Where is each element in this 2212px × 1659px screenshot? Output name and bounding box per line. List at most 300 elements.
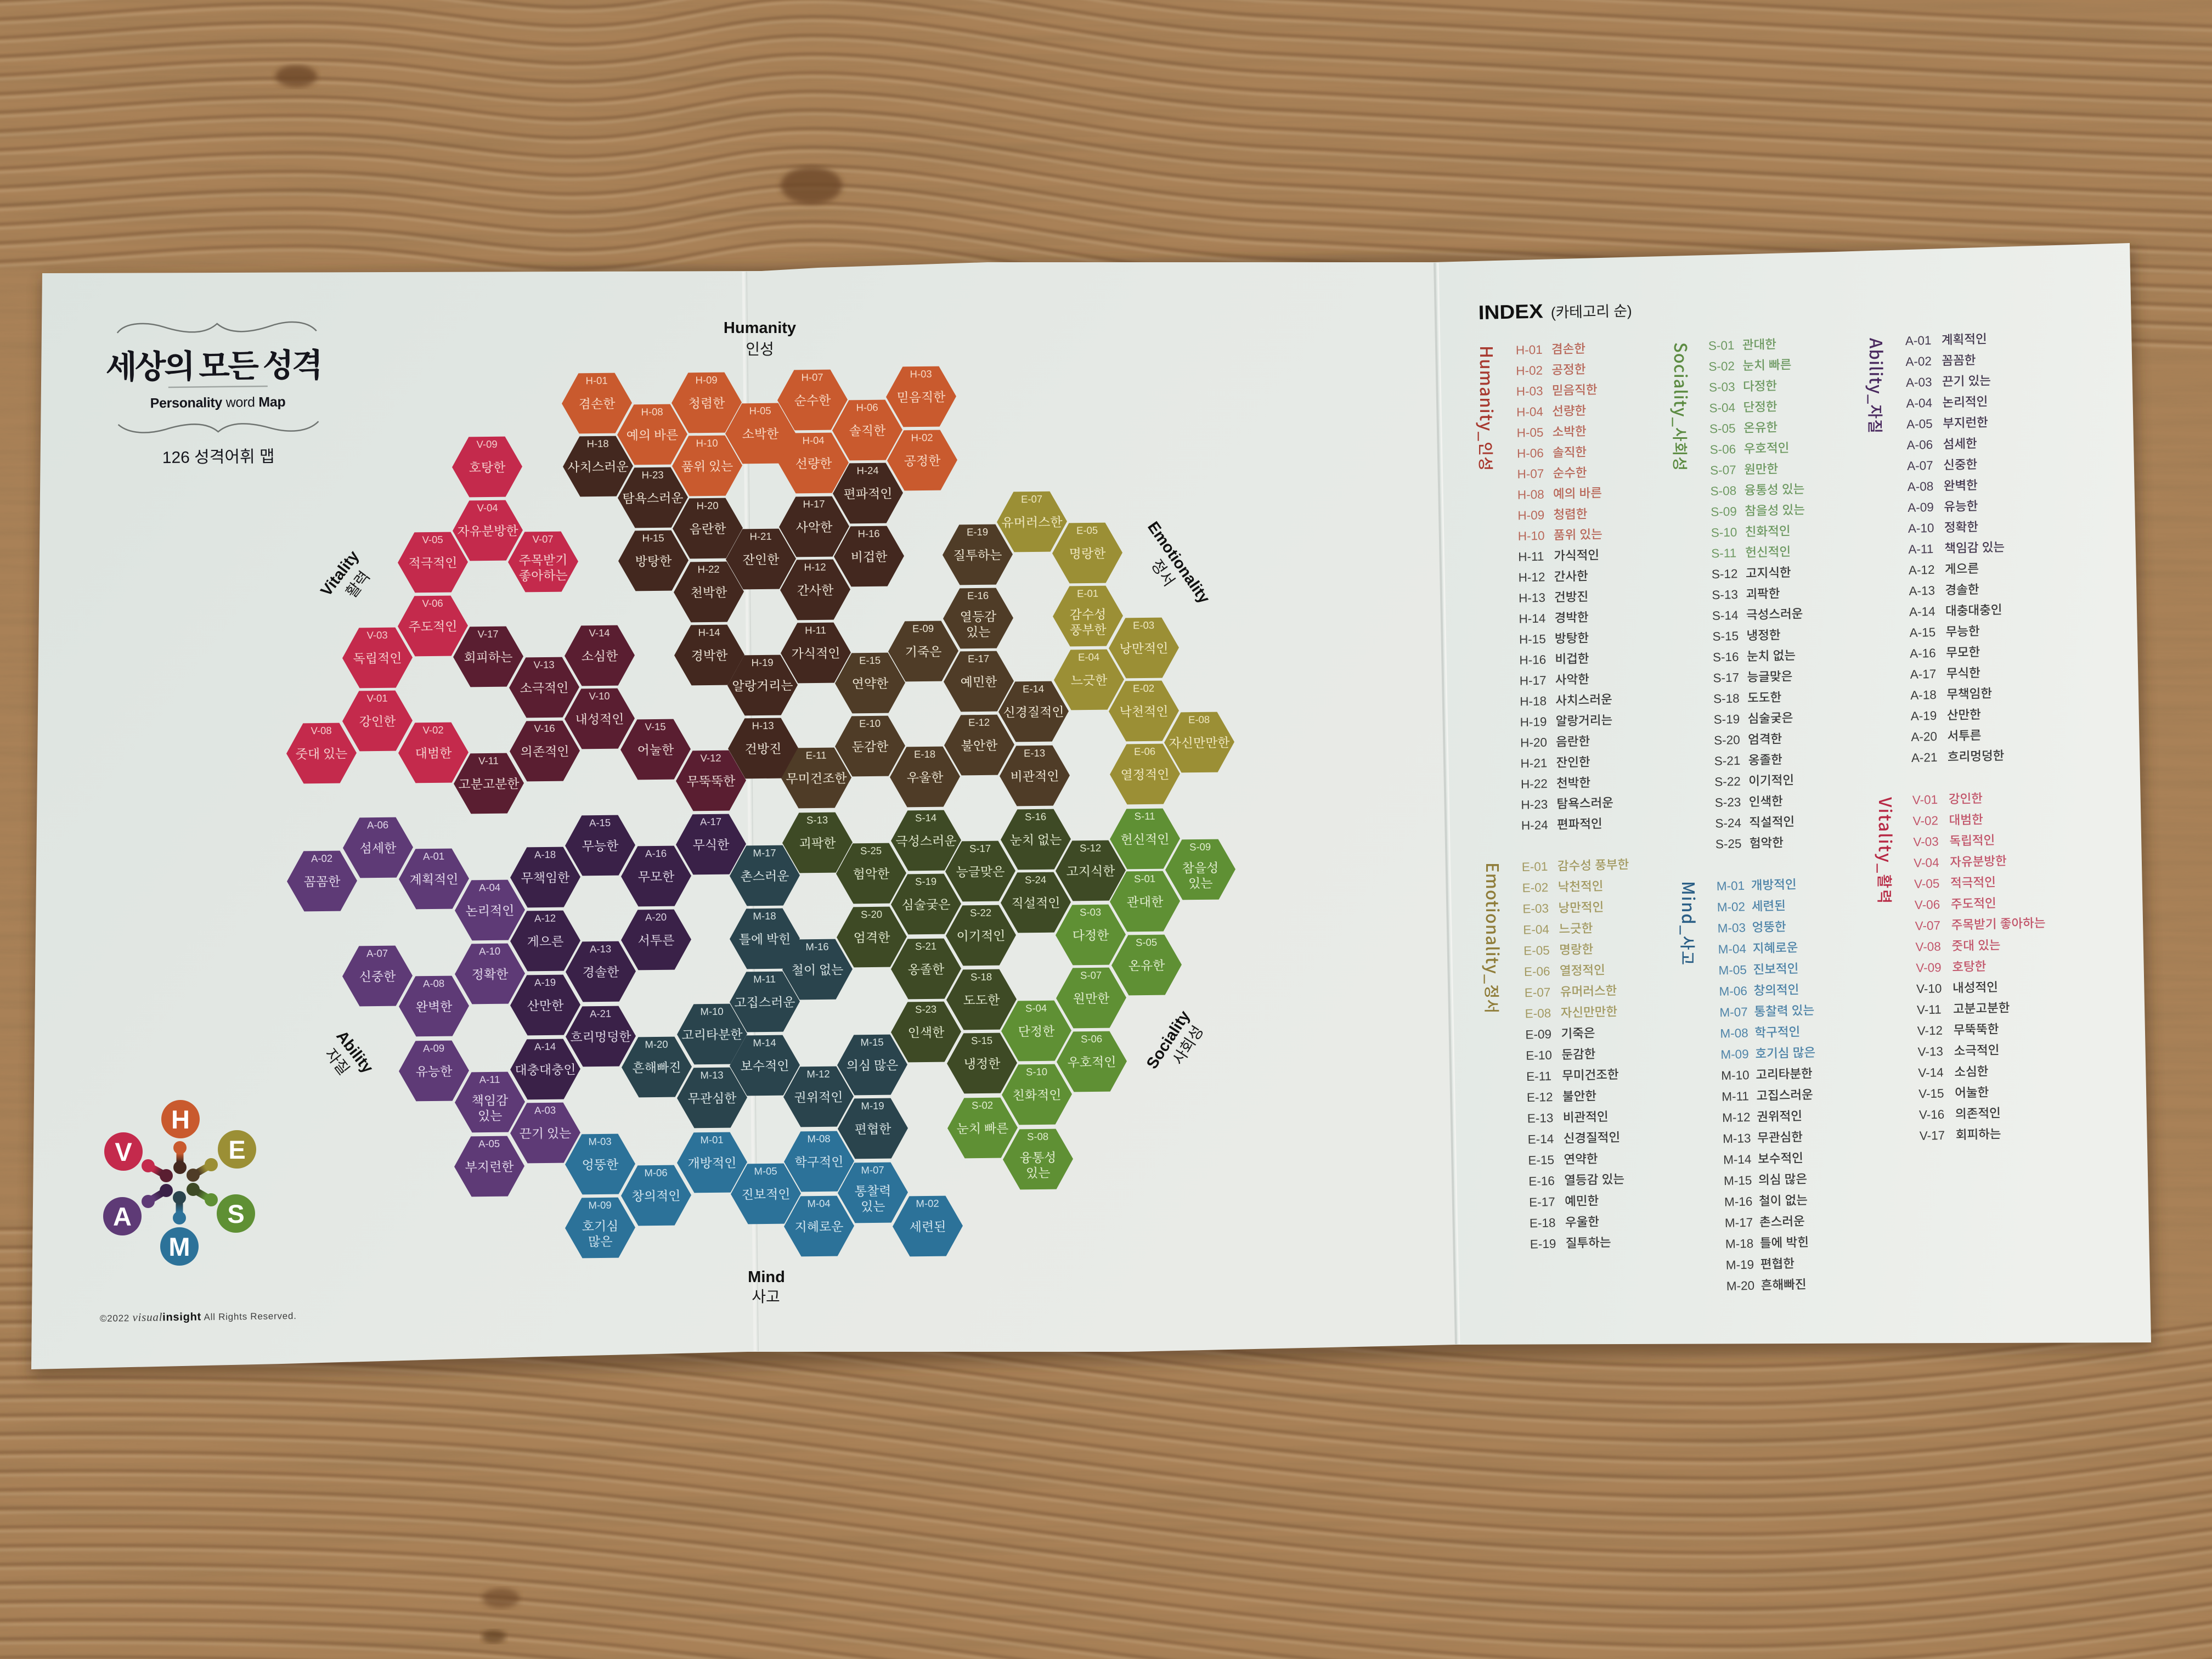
category label: Sociality: 사회성	[1169, 1023, 1206, 1068]
index list: Humanity: H-06	[1517, 446, 1544, 460]
index list: Emotionality: 우울한	[1565, 1215, 1599, 1229]
index list: Ability: 게으른	[1945, 562, 1979, 576]
index list: Sociality: 다정한	[1743, 379, 1777, 393]
index list: Emotionality: 둔감한	[1561, 1047, 1596, 1062]
index list: Sociality: S-12	[1712, 567, 1738, 581]
node: V	[104, 1132, 143, 1171]
index list: Humanity: 가식적인	[1554, 548, 1599, 563]
category label: Ability: Ability	[332, 1028, 376, 1076]
index list: Emotionality: E-10	[1526, 1048, 1552, 1063]
category label: Humanity: 인성	[746, 341, 774, 358]
Ability hexagons: 논리적인	[465, 904, 515, 918]
Vitality hexagons: 고분고분한	[458, 777, 520, 792]
index list: Vitality: V-09	[1916, 961, 1942, 975]
Mind hexagons: M-17	[753, 847, 776, 859]
index list: Ability: 서투른	[1947, 729, 1982, 743]
Sociality hexagons: 다정한	[1073, 929, 1109, 943]
Sociality hexagons: S-19	[915, 876, 936, 887]
Humanity hexagons: H-19	[751, 657, 774, 668]
Ability hexagons: A-08	[423, 978, 444, 989]
index list: Humanity: 알랑거리는	[1556, 713, 1612, 729]
Sociality hexagons: S-22	[970, 907, 991, 918]
Sociality hexagons: 심술궂은	[901, 898, 951, 912]
Sociality hexagons: 융통성	[1020, 1151, 1056, 1165]
Mind hexagons: 창의적인	[631, 1189, 681, 1203]
index list: Sociality: S-05	[1709, 421, 1736, 436]
index list: Vitality: 대범한	[1949, 812, 1983, 827]
Mind hexagons: M-05	[754, 1165, 777, 1177]
index list: Mind: M-17	[1725, 1216, 1753, 1230]
Humanity hexagons: H-17	[803, 498, 825, 510]
Humanity hexagons: 비겁한	[851, 550, 888, 564]
Sociality hexagons: 이기적인	[956, 929, 1006, 943]
index list: Mind: M-18	[1725, 1237, 1753, 1251]
Mind hexagons: 세련된	[910, 1220, 946, 1234]
Emotionality hexagons: 낙천적인	[1119, 705, 1169, 719]
index list: Humanity: H-09	[1517, 508, 1544, 522]
category label: Emotionality: 정서	[1148, 556, 1178, 589]
Sociality hexagons: S-17	[969, 843, 991, 854]
spoke: A	[142, 1184, 173, 1208]
index list: Sociality: S-15	[1712, 629, 1739, 644]
spoke: H	[173, 1141, 187, 1174]
index heading: INDEX	[1478, 300, 1543, 324]
title block	[105, 321, 324, 467]
Mind hexagons: 무관심한	[687, 1092, 737, 1105]
Emotionality hexagons: 비관적인	[1010, 770, 1059, 783]
index list: Humanity: 방탕한	[1555, 631, 1589, 646]
index list: Mind: M-19	[1726, 1257, 1754, 1272]
index list: Ability: A-20	[1911, 730, 1937, 744]
index list: Sociality: S-16	[1713, 650, 1739, 664]
Ability hexagons: A-18	[534, 849, 556, 860]
Vitality hexagons: 강인한	[359, 715, 396, 729]
Humanity hexagons: 소박한	[742, 427, 779, 441]
Sociality hexagons: 극성스러운	[895, 834, 957, 849]
Vitality hexagons: 독립적인	[353, 652, 402, 665]
Sociality hexagons: S-01	[1134, 873, 1155, 884]
index list: Vitality: 독립적인	[1949, 833, 1995, 848]
index list: Humanity: H-19	[1520, 715, 1547, 729]
index list: Mind: M-11	[1722, 1090, 1749, 1104]
index list: Humanity: H-04	[1516, 405, 1543, 419]
Mind hexagons: 진보적인	[741, 1188, 791, 1201]
Ability hexagons: 꼼꼼한	[304, 875, 341, 889]
index list: Emotionality: 무미건조한	[1562, 1068, 1619, 1082]
Sociality hexagons: S-15	[971, 1035, 992, 1046]
Vitality hexagons: 소극적인	[520, 681, 569, 695]
title ornament bottom	[119, 421, 319, 433]
Humanity hexagons: 알랑거리는	[732, 679, 793, 693]
Ability hexagons: 계획적인	[409, 873, 459, 887]
Ability hexagons: A-13	[590, 943, 611, 955]
index list: Sociality: S-04	[1709, 400, 1735, 415]
index list: Emotionality: E-13	[1527, 1111, 1554, 1125]
index list: Vitality: 회피하는	[1956, 1127, 2001, 1142]
Mind hexagons: 틀에 박힌	[739, 933, 791, 946]
index list: Ability: A-02	[1905, 354, 1932, 369]
Sociality hexagons	[782, 808, 1236, 1190]
Sociality hexagons: S-05	[1136, 936, 1157, 948]
index list: Humanity: H-22	[1521, 777, 1548, 791]
index list: Ability: A-03	[1906, 375, 1932, 390]
Ability hexagons: A-12	[534, 912, 556, 924]
Vitality hexagons: 적극적인	[408, 556, 458, 570]
Sociality hexagons: 있는	[1026, 1166, 1051, 1180]
Mind hexagons: M-13	[700, 1069, 724, 1081]
index list: Humanity: 공정한	[1551, 363, 1586, 377]
index list: Vitality: 호탕한	[1952, 960, 1987, 974]
index list: Vitality: 주목받기 좋아하는	[1951, 916, 2046, 932]
index list: Ability: 무모한	[1946, 645, 1980, 659]
index list: Emotionality: 열정적인	[1560, 963, 1605, 978]
Humanity hexagons: 사악한	[796, 521, 833, 534]
Sociality hexagons: 험악한	[853, 867, 890, 881]
Humanity hexagons: 건방진	[745, 742, 781, 756]
index list: Humanity: H-07	[1517, 467, 1544, 481]
index list: Mind: 진보적인	[1753, 962, 1799, 977]
Emotionality hexagons: 우울한	[907, 771, 944, 785]
index list: Humanity: H-18	[1520, 694, 1547, 708]
index list: Sociality: 관대한	[1742, 337, 1776, 352]
index list: Emotionality: 낙천적인	[1558, 879, 1604, 894]
index list: Sociality: 험악한	[1750, 836, 1784, 850]
Ability hexagons: 경솔한	[583, 966, 619, 979]
index list: Sociality: S-21	[1714, 754, 1740, 768]
index list: Vitality: V-14	[1918, 1065, 1944, 1080]
Emotionality hexagons: E-07	[1021, 493, 1042, 505]
Vitality hexagons: V-06	[422, 597, 443, 609]
index list: Mind: 개방적인	[1751, 878, 1797, 892]
index list: Mind: 보수적인	[1758, 1151, 1803, 1166]
Sociality hexagons: S-14	[915, 812, 936, 823]
index list: Humanity: 순수한	[1553, 466, 1587, 480]
index list: Humanity: H-20	[1520, 736, 1547, 750]
index list: Sociality: 엄격한	[1748, 732, 1782, 747]
Humanity hexagons: 음란한	[690, 522, 726, 536]
index list: Ability: A-10	[1908, 521, 1934, 535]
Vitality hexagons: V-11	[478, 755, 499, 766]
index list: Sociality: 융통성 있는	[1745, 482, 1805, 498]
index list: Emotionality: 명랑한	[1559, 943, 1594, 957]
index list: Ability: A-17	[1910, 667, 1936, 681]
index list: Ability: A-05	[1906, 417, 1933, 431]
Emotionality hexagons: E-02	[1133, 682, 1154, 694]
Mind hexagons: M-11	[753, 973, 776, 985]
category label: Humanity: Humanity	[724, 319, 796, 337]
index list: Vitality: 고분고분한	[1953, 1001, 2010, 1016]
Humanity hexagons: H-03	[910, 368, 932, 380]
Vitality hexagons: 자유분방한	[457, 524, 518, 539]
Emotionality hexagons: E-19	[967, 526, 988, 538]
index list: Emotionality: 불안한	[1562, 1089, 1596, 1104]
index list: Emotionality: E-16	[1528, 1174, 1555, 1188]
index list: Vitality: 자유분방한	[1950, 854, 2007, 869]
index list: Mind: M-09	[1720, 1047, 1749, 1062]
index list: Vitality: 줏대 있는	[1951, 938, 2001, 953]
Vitality hexagons: 주도적인	[408, 620, 458, 634]
Humanity hexagons: H-22	[697, 563, 720, 575]
index list: Sociality: S-02	[1708, 359, 1735, 374]
panel: folded paper sheet	[31, 243, 2151, 1369]
index list: Humanity: 건방진	[1554, 590, 1588, 604]
index list: Mind: M-20	[1726, 1279, 1754, 1293]
Ability hexagons: 무능한	[582, 839, 619, 853]
index list: Ability: 책임감 있는	[1944, 540, 2005, 555]
index list: Sociality: 단정한	[1743, 400, 1778, 414]
Vitality hexagons: V-04	[477, 502, 498, 514]
Sociality hexagons: 냉정한	[964, 1057, 1001, 1071]
Mind hexagons: M-12	[806, 1068, 830, 1080]
index list: Humanity: H-13	[1519, 591, 1545, 605]
Mind hexagons: M-19	[861, 1100, 884, 1111]
Ability hexagons: A-04	[479, 882, 500, 893]
index list: Humanity: H-11	[1518, 550, 1544, 564]
Emotionality hexagons: E-01	[1077, 588, 1098, 599]
Vitality hexagons: 대범한	[415, 747, 452, 760]
index list: Humanity: 겸손한	[1551, 342, 1585, 356]
index list: Sociality: 직설적인	[1749, 815, 1795, 830]
index list: Sociality: S-23	[1715, 795, 1741, 810]
logo: HESMAV flower	[103, 1100, 256, 1266]
Sociality hexagons: S-18	[970, 971, 992, 983]
index list: Sociality: 고지식한	[1746, 566, 1791, 580]
Mind hexagons: 지혜로운	[794, 1220, 844, 1234]
title ornament top	[117, 322, 317, 333]
index list: Emotionality: E-12	[1527, 1090, 1553, 1104]
index list: Humanity: H-12	[1519, 570, 1545, 584]
index list: Sociality: S-07	[1710, 463, 1736, 477]
index list: Sociality: 극성스러운	[1746, 607, 1803, 622]
Vitality hexagons: 회피하는	[464, 651, 513, 664]
index heading: (카테고리 순)	[1550, 303, 1632, 321]
Vitality hexagons: V-01	[366, 692, 388, 704]
Sociality hexagons: S-11	[1135, 810, 1155, 822]
Humanity hexagons: 천박한	[691, 586, 727, 600]
index list: Ability: A-09	[1908, 500, 1934, 515]
Emotionality hexagons: 있는	[966, 625, 991, 639]
Humanity hexagons: H-02	[911, 432, 933, 443]
index list: Mind: 고리타분한	[1756, 1066, 1813, 1082]
category label: Vitality: 활력	[343, 568, 373, 601]
Emotionality hexagons: 무미건조한	[786, 771, 847, 786]
index list: Ability: 논리적인	[1942, 394, 1988, 409]
index list: Ability: 끈기 있는	[1942, 374, 1991, 388]
Vitality hexagons: V-07	[532, 533, 554, 545]
index list: Vitality: V-17	[1920, 1128, 1945, 1143]
Sociality hexagons: 도도한	[963, 994, 1000, 1007]
index list: Mind: M-15	[1724, 1173, 1752, 1188]
Mind hexagons: 의심 많은	[847, 1059, 898, 1073]
index list: Ability: 유능한	[1944, 499, 1978, 514]
index list: Humanity: 솔직한	[1553, 445, 1587, 460]
Ability hexagons: A-14	[534, 1041, 556, 1052]
Emotionality hexagons: 불안한	[961, 739, 998, 753]
index list: Ability: A-19	[1911, 709, 1937, 723]
Sociality hexagons: S-24	[1025, 874, 1046, 885]
index list: Mind: M-07	[1719, 1005, 1748, 1019]
Vitality hexagons: V-17	[477, 628, 499, 640]
index list: Ability: 부지런한	[1943, 415, 1988, 430]
index list: Emotionality: E-09	[1525, 1027, 1551, 1042]
index list: Sociality: 온유한	[1743, 420, 1778, 435]
index list: Humanity: 편파적인	[1557, 817, 1602, 832]
Vitality hexagons: V-16	[534, 723, 555, 734]
index list: Mind: M-03	[1717, 921, 1746, 935]
Humanity hexagons: 예의 바른	[627, 428, 678, 442]
index list: Mind: M-04	[1718, 942, 1746, 956]
index list: Vitality: 무뚝뚝한	[1953, 1022, 1999, 1037]
index list: Emotionality: E-19	[1530, 1237, 1556, 1251]
Humanity hexagons: 가식적인	[791, 647, 840, 661]
category label: Emotionality: Emotionality	[1144, 518, 1213, 607]
index list: Mind: 학구적인	[1754, 1025, 1801, 1040]
node: E	[218, 1130, 256, 1169]
index list: Vitality: V-10	[1916, 981, 1942, 996]
Mind hexagons: M-14	[753, 1037, 776, 1048]
Emotionality hexagons: 느긋한	[1071, 674, 1108, 687]
index list: Mind: M-08	[1720, 1026, 1748, 1041]
Vitality hexagons: V-15	[645, 721, 666, 732]
Mind hexagons: 엉뚱한	[582, 1158, 619, 1172]
index list: Vitality: V-13	[1917, 1045, 1943, 1059]
index list: Sociality	[1708, 337, 1810, 851]
Ability hexagons: 산만한	[527, 999, 564, 1013]
index list: Sociality: 심술궂은	[1747, 711, 1793, 726]
Vitality hexagons: V-02	[422, 724, 444, 736]
Mind hexagons: 학구적인	[794, 1155, 844, 1169]
Emotionality hexagons: 질투하는	[953, 549, 1002, 562]
index list: Emotionality: 느긋한	[1559, 922, 1593, 936]
Sociality hexagons: S-16	[1025, 811, 1046, 822]
Emotionality hexagons: E-03	[1133, 619, 1154, 631]
node: A	[103, 1197, 142, 1235]
subtitle english: Personality word Map	[150, 394, 286, 411]
index list: Mind: 편협한	[1760, 1257, 1795, 1271]
index list: Mind: 고집스러운	[1756, 1088, 1813, 1103]
Humanity hexagons: H-18	[586, 438, 609, 449]
Sociality hexagons: 옹졸한	[908, 963, 945, 977]
index list: Vitality: 어눌한	[1955, 1085, 1989, 1100]
Humanity hexagons: 간사한	[797, 584, 834, 597]
Sociality hexagons: S-13	[806, 814, 828, 826]
index list: Humanity: H-08	[1517, 488, 1544, 502]
Humanity hexagons: 공정한	[904, 454, 941, 468]
Ability hexagons: A-21	[590, 1008, 611, 1019]
Vitality hexagons: 의존적인	[520, 745, 569, 759]
Humanity hexagons: H-16	[857, 528, 880, 539]
index list: Emotionality: E-03	[1522, 901, 1549, 916]
hexagon map	[286, 366, 1236, 1259]
Ability hexagons: A-19	[534, 977, 556, 988]
index list: Vitality: 의존적인	[1955, 1106, 2001, 1121]
index list: Ability: 대충대충인	[1945, 603, 2002, 618]
Sociality hexagons: 관대한	[1127, 895, 1164, 909]
index list: Ability: 완벽한	[1944, 478, 1978, 493]
Humanity hexagons: H-14	[698, 627, 720, 638]
index vertical heading: Sociality: Sociality_ 사회성	[1669, 342, 1694, 471]
Vitality hexagons: V-10	[589, 690, 610, 702]
index list: Sociality: S-22	[1714, 775, 1741, 789]
index list: Humanity: 간사한	[1554, 569, 1588, 584]
index list: Vitality: 소극적인	[1954, 1043, 2000, 1058]
index list: Humanity	[1516, 341, 1614, 832]
index list: Ability: 경솔한	[1945, 583, 1979, 597]
index list: Vitality: V-15	[1918, 1086, 1944, 1101]
index list: Ability: 산만한	[1947, 708, 1981, 722]
index list: Sociality: 도도한	[1747, 691, 1781, 705]
index list: Humanity: H-05	[1517, 426, 1544, 440]
Sociality hexagons: S-08	[1027, 1131, 1048, 1142]
Emotionality hexagons: 감수성	[1070, 608, 1106, 622]
index list: Mind: 촌스러운	[1759, 1214, 1805, 1229]
index list: Emotionality: 열등감 있는	[1564, 1172, 1624, 1187]
Vitality hexagons: 어눌한	[637, 743, 674, 757]
index list: Emotionality: E-06	[1524, 964, 1550, 979]
index list: Ability: 흐리멍덩한	[1948, 749, 2005, 764]
index list: Ability: A-12	[1909, 563, 1935, 577]
paper shadow	[31, 249, 2154, 1376]
Sociality hexagons: 괴팍한	[799, 837, 836, 850]
index list: Humanity: H-16	[1519, 653, 1546, 667]
Emotionality hexagons: 기죽은	[905, 645, 941, 659]
index list: Humanity: H-15	[1519, 632, 1546, 646]
Humanity hexagons: 사치스러운	[567, 460, 629, 475]
index list: Sociality: 헌신적인	[1745, 545, 1791, 560]
title rule	[168, 386, 268, 387]
Vitality hexagons: 좋아하는	[519, 569, 568, 583]
node: M	[160, 1227, 199, 1266]
index list: Ability: A-14	[1909, 605, 1936, 619]
Ability hexagons: 대충대충인	[515, 1063, 576, 1077]
index list: Mind: 통찰력 있는	[1754, 1003, 1815, 1019]
index list: Humanity: H-23	[1521, 798, 1548, 812]
Sociality hexagons: S-23	[915, 1003, 936, 1015]
index vertical heading: Mind: Mind_ 사고	[1677, 881, 1702, 965]
Sociality hexagons: 단정한	[1018, 1025, 1055, 1039]
index list: Mind: M-01	[1717, 879, 1745, 893]
index list: Ability: A-06	[1906, 438, 1933, 452]
index vertical heading: Ability: Ability_ 자질	[1865, 338, 1889, 433]
index list: Sociality: S-03	[1709, 380, 1735, 394]
Ability hexagons: A-02	[311, 853, 332, 864]
Ability hexagons: 게으른	[527, 935, 563, 949]
Emotionality hexagons: E-18	[914, 748, 935, 760]
Mind hexagons: 보수적인	[740, 1059, 789, 1073]
index list: Vitality: 강인한	[1949, 792, 1983, 806]
Emotionality hexagons: E-05	[1076, 524, 1098, 536]
Sociality hexagons: 눈치 빠른	[957, 1122, 1008, 1136]
spoke: V	[142, 1159, 173, 1182]
subtitle korean: 126 성격어휘 맵	[162, 448, 275, 467]
Ability hexagons: 무모한	[638, 870, 675, 884]
Ability hexagons: A-11	[479, 1074, 500, 1085]
Ability hexagons: 유능한	[416, 1065, 453, 1079]
Mind hexagons: 많은	[588, 1235, 613, 1249]
index list: Ability: A-18	[1910, 688, 1937, 702]
Mind hexagons	[565, 845, 963, 1259]
index list: Vitality: V-01	[1912, 793, 1938, 807]
index list: Mind: 호기심 많은	[1755, 1046, 1815, 1060]
category label: Mind: 사고	[752, 1288, 780, 1305]
Ability hexagons: 끈기 있는	[520, 1127, 571, 1141]
Mind hexagons: 통찰력	[855, 1184, 891, 1198]
index list: Ability: A-08	[1908, 479, 1933, 494]
Sociality hexagons: 직설적인	[1011, 896, 1060, 910]
Mind hexagons: M-15	[860, 1036, 884, 1048]
index list: Sociality: 원만한	[1744, 462, 1778, 477]
index list: Emotionality: E-01	[1522, 860, 1548, 874]
